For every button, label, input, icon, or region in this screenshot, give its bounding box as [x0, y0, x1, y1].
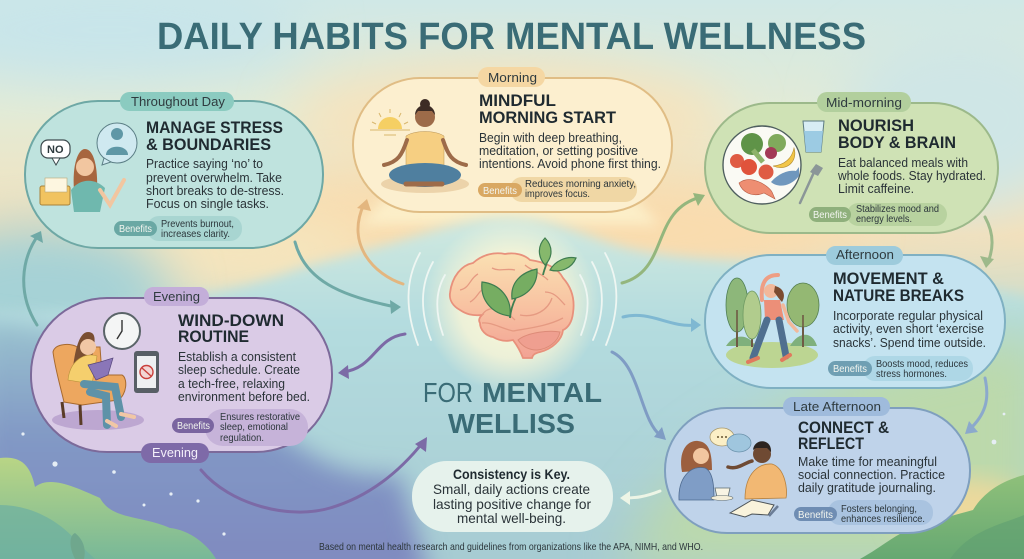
center heading: FOR [423, 377, 473, 408]
icon: woman saying no: NO [47, 144, 64, 156]
main title: DAILY HABITS FOR MENTAL WELLNESS [157, 16, 866, 58]
time label: Morning [488, 70, 537, 85]
callout: consistency: lasting positive change for [433, 496, 591, 512]
benefits: Reduces morning anxiety, [525, 179, 636, 190]
callout: consistency: Consistency is Key. [453, 466, 570, 482]
heading: BODY & BRAIN [838, 133, 956, 152]
heading: & BOUNDARIES [146, 135, 271, 154]
icon: two people talking [679, 428, 787, 517]
description [146, 156, 284, 211]
center heading: MENTAL [482, 377, 602, 408]
heading: MANAGE STRESS [146, 118, 283, 137]
icon: person walking in nature [726, 275, 819, 368]
callout: consistency: mental well-being. [457, 510, 566, 526]
arrow: mid-morning to afternoon [980, 217, 994, 268]
description: Incorporate regular physical [833, 308, 983, 323]
arrow: center to late afternoon [612, 352, 666, 440]
benefits: energy levels. [856, 214, 912, 225]
arrow: late afternoon to callout [620, 491, 660, 505]
benefits [478, 177, 637, 202]
description [178, 349, 310, 404]
benefits: improves focus. [525, 189, 590, 200]
benefits: Ensures restorative [220, 412, 300, 423]
panel: late afternoon [665, 397, 970, 533]
time label [120, 92, 234, 111]
arrow: evening to center [201, 437, 427, 512]
benefits: Benefits [177, 421, 210, 432]
center heading [423, 377, 602, 439]
heading [479, 91, 617, 127]
time label [783, 397, 890, 416]
heading [838, 116, 956, 152]
heading: CONNECT & [798, 418, 889, 437]
benefits: Stabilizes mood and [856, 204, 939, 215]
description: Eat balanced meals with [838, 155, 968, 170]
benefits: Benefits [798, 510, 833, 521]
heading: NATURE BREAKS [833, 286, 964, 305]
description [479, 130, 661, 171]
time label [478, 67, 545, 87]
description: whole foods. Stay hydrated. [837, 168, 986, 183]
icon: plate of food, water and fork [723, 121, 824, 204]
arrow: throughout day to center [295, 242, 401, 314]
sparkles [21, 413, 1005, 536]
heading: NOURISH [838, 116, 914, 135]
heading: WIND-DOWN [178, 311, 284, 330]
panel: mid-morning [705, 92, 998, 233]
description: intentions. Avoid phone first thing. [479, 156, 661, 171]
time label: Throughout Day [131, 94, 225, 109]
description: daily gratitude journaling. [798, 480, 936, 495]
heading: MINDFUL [479, 91, 556, 110]
description: a tech-free, relaxing [178, 376, 285, 391]
heading: REFLECT [798, 434, 865, 453]
description: Establish a consistent [178, 349, 296, 364]
heading [178, 311, 284, 346]
benefits: sleep, emotional [220, 422, 288, 433]
time label [826, 246, 903, 265]
arrow: center to mid-morning [622, 193, 705, 283]
heading: MORNING START [479, 108, 617, 127]
benefits [794, 500, 933, 525]
benefits [809, 203, 947, 226]
heading [146, 118, 283, 154]
arrow: center to afternoon [623, 315, 701, 332]
arrow: center to morning [357, 199, 403, 284]
description: Limit caffeine. [838, 181, 914, 196]
benefits: Prevents burnout, [161, 219, 234, 230]
second time label: Evening [152, 445, 198, 460]
foliage bottom left [0, 458, 216, 559]
source note: Based on mental health research and guidelines from organizations like the APA, NIMH, and WHO. [319, 541, 703, 553]
description: meditation, or setting positive [479, 143, 638, 158]
center heading: WELLISS [448, 408, 575, 439]
time label [144, 287, 209, 306]
description: Begin with deep breathing, [479, 130, 622, 145]
benefits: Fosters belonging, [841, 504, 917, 515]
time label: Evening [153, 289, 200, 304]
benefits: enhances resilience. [841, 514, 925, 525]
heading [833, 269, 964, 305]
benefits [172, 409, 308, 446]
description: sleep schedule. Create [178, 362, 300, 377]
description [798, 454, 945, 495]
benefits: Benefits [119, 224, 152, 235]
panel: afternoon [705, 246, 1005, 388]
callout: consistency: Small, daily actions create [433, 481, 590, 497]
panel: morning [353, 67, 672, 212]
second time label [141, 443, 209, 463]
benefits [828, 356, 973, 381]
description: prevent overwhelm. Take [146, 170, 282, 185]
icon: woman saying no [40, 123, 137, 212]
description: environment before bed. [178, 389, 310, 404]
time label: Afternoon [836, 247, 894, 262]
callout: consistency [412, 461, 613, 532]
description: short breaks to de-stress. [146, 183, 284, 198]
description: Focus on single tasks. [146, 196, 269, 211]
benefits: Benefits [833, 364, 867, 375]
description [837, 155, 986, 196]
benefits: increases clarity. [161, 229, 230, 240]
benefits: Boosts mood, reduces [876, 359, 968, 370]
time label: Late Afternoon [793, 399, 881, 414]
heading: ROUTINE [178, 327, 249, 346]
description: Make time for meaningful [798, 454, 937, 469]
arrow: afternoon to late afternoon [965, 378, 987, 434]
heading [798, 418, 889, 453]
icon: woman reading, clock and phone [52, 313, 159, 430]
heading: MOVEMENT & [833, 269, 944, 288]
foliage bottom right [860, 475, 1024, 559]
description: Practice saying ‘no’ to [146, 156, 263, 171]
description: snacks’. Spend time outside. [833, 335, 986, 350]
benefits: Benefits [483, 186, 517, 197]
arrow: center to evening [338, 334, 405, 379]
benefits: stress hormones. [876, 369, 947, 380]
arrow: evening to throughout day [24, 231, 43, 325]
benefits [114, 216, 242, 241]
benefits: Benefits [813, 210, 847, 221]
description [833, 308, 986, 350]
time label: Mid-morning [826, 95, 902, 110]
panel: evening [31, 287, 332, 463]
icon: central brain with leaves [408, 217, 616, 393]
panel: throughout day [25, 92, 323, 248]
benefits: regulation. [220, 433, 264, 444]
description: activity, even short ‘exercise [833, 321, 984, 336]
icon: meditating person and sun [370, 99, 469, 193]
description: social connection. Practice [798, 467, 945, 482]
time label [817, 92, 911, 112]
